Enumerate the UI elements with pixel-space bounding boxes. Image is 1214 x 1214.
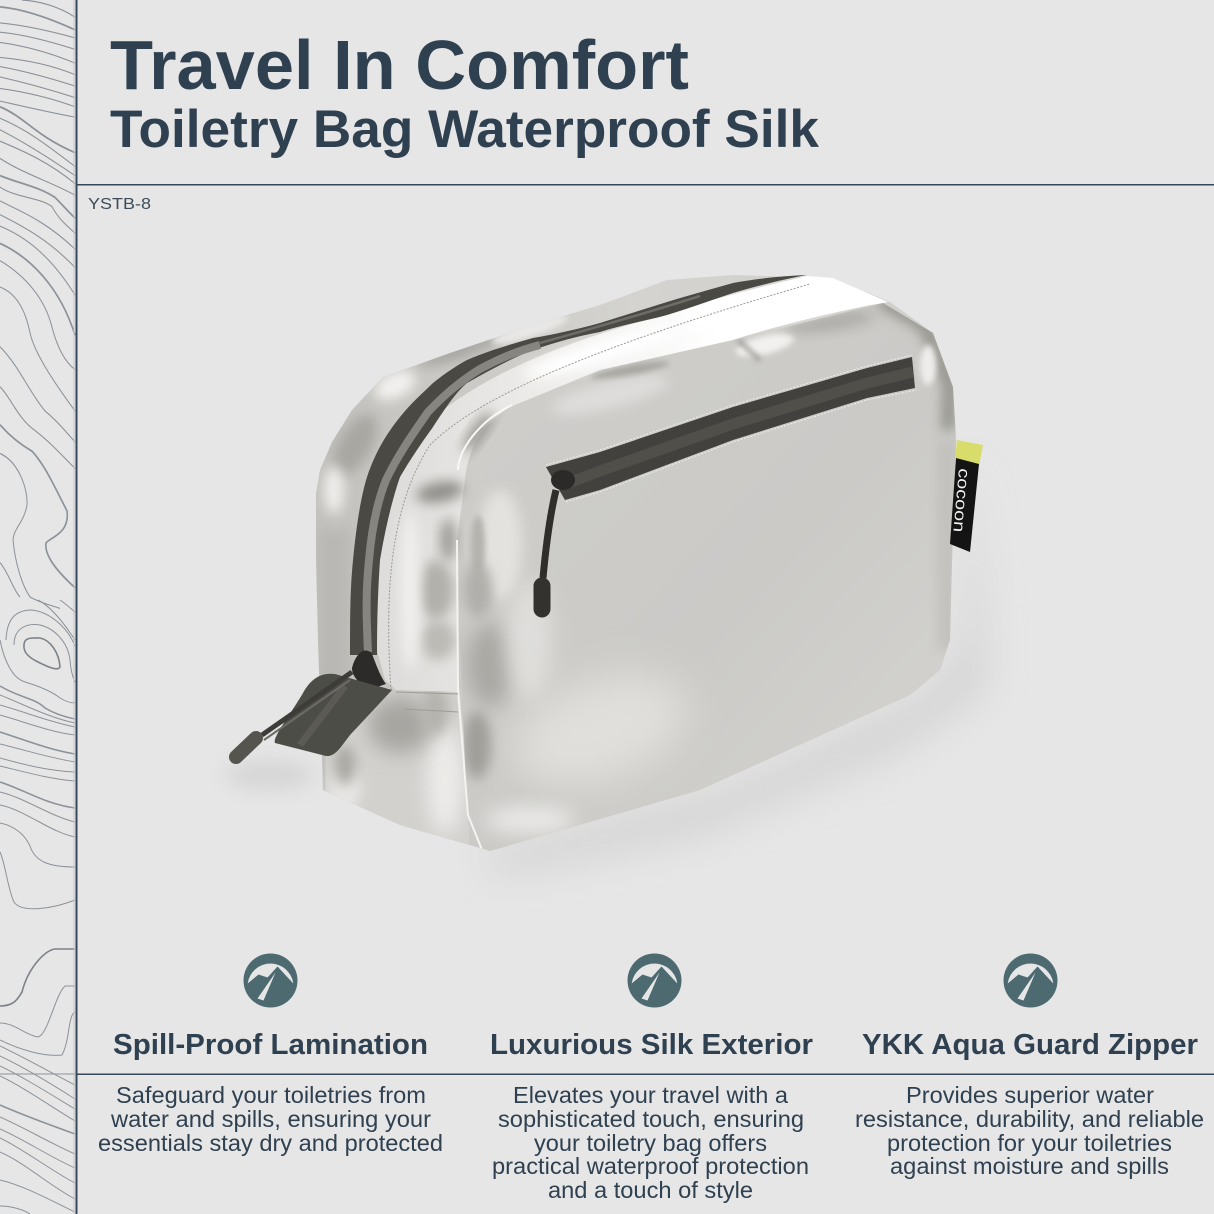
- description: essentials stay dry and protected: [98, 1130, 443, 1156]
- brand label: cocoon: [949, 468, 972, 533]
- description: [98, 1082, 443, 1156]
- band between main zipper and front panel: [375, 276, 888, 692]
- description: Safeguard your toiletries from: [116, 1082, 426, 1108]
- description: Provides superior water: [906, 1082, 1154, 1108]
- pocket zip knot: [551, 470, 575, 490]
- front panel: [457, 303, 956, 851]
- description: and a touch of style: [548, 1177, 753, 1203]
- feature 3: [855, 954, 1204, 1179]
- zipper top highlight: [540, 296, 700, 343]
- title: Travel In Comfort: [110, 26, 689, 104]
- pocket zipper stitching: [546, 355, 916, 502]
- stitching along main zipper: [389, 284, 810, 690]
- silk side shading: [318, 311, 570, 850]
- bag body: [316, 275, 956, 851]
- description: Elevates your travel with a: [513, 1082, 789, 1108]
- tab webbing fold: [300, 686, 345, 745]
- zipper tab webbing: [275, 674, 392, 756]
- heading: YKK Aqua Guard Zipper: [862, 1029, 1198, 1061]
- icon: mountain badge: [628, 954, 682, 1008]
- description: your toiletry bag offers: [534, 1130, 767, 1156]
- heading: Spill-Proof Lamination: [113, 1029, 428, 1061]
- product code: YSTB-8: [88, 196, 151, 213]
- ground shadow: [480, 450, 985, 875]
- pocket zipper texture: [566, 372, 913, 484]
- front panel silk shading: [463, 300, 956, 832]
- zipper inner tape: [367, 345, 540, 652]
- zip pull at base of main zipper: [352, 650, 386, 690]
- description: resistance, durability, and reliable: [855, 1106, 1204, 1132]
- description: against moisture and spills: [890, 1153, 1169, 1179]
- product image: toiletry bag: [225, 275, 985, 875]
- description: sophisticated touch, ensuring: [498, 1106, 804, 1132]
- description: [855, 1082, 1204, 1179]
- description: water and spills, ensuring your: [110, 1106, 431, 1132]
- pocket zip tip: [534, 586, 550, 609]
- topographic contour strip: [0, 0, 75, 1214]
- tab cord: [262, 672, 352, 735]
- tab cord second strand: [264, 680, 350, 740]
- brand label: [949, 440, 983, 552]
- subtitle: Toiletry Bag Waterproof Silk: [110, 100, 820, 159]
- pocket zip cord: [543, 490, 556, 578]
- main zipper: [350, 275, 807, 655]
- icon: mountain badge: [244, 954, 298, 1008]
- description: practical waterproof protection: [492, 1153, 809, 1179]
- small pocket zipper: [546, 357, 915, 500]
- tab cord tip: [236, 738, 256, 757]
- description: [492, 1082, 809, 1203]
- feature 2: [490, 954, 813, 1203]
- band silk shading: [396, 275, 866, 850]
- tab shadow: [225, 761, 315, 789]
- description: protection for your toiletries: [887, 1130, 1172, 1156]
- feature 1: [98, 954, 443, 1156]
- heading: Luxurious Silk Exterior: [490, 1029, 813, 1061]
- icon: mountain badge: [1004, 954, 1058, 1008]
